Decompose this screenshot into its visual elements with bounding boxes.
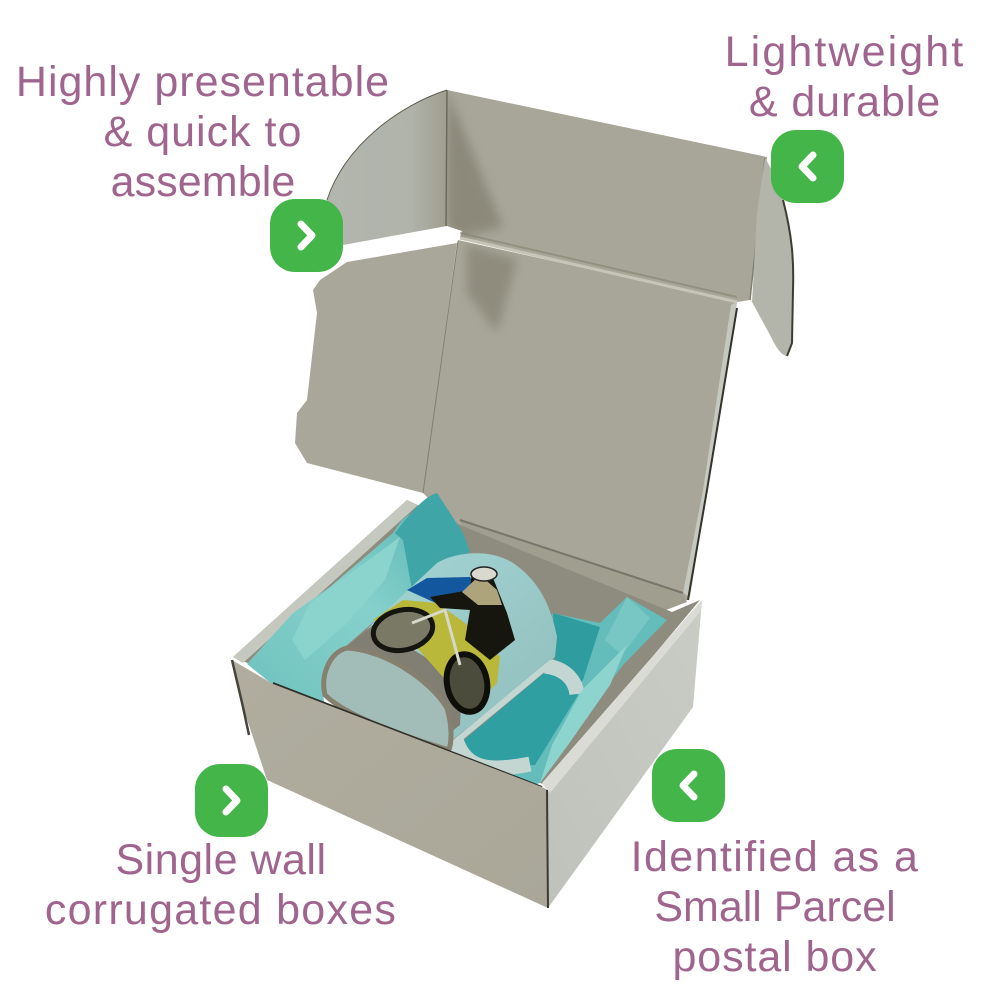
caption: top right: Lightweight — [725, 28, 965, 76]
mug print: rider — [430, 570, 515, 660]
box left rim — [233, 500, 418, 663]
upper lid flap — [446, 90, 767, 302]
caption: bottom right: Identified as a — [631, 833, 919, 881]
caption: bottom left: corrugated boxes — [45, 886, 397, 934]
upper left dust flap — [327, 90, 447, 246]
caption: bottom right: Small Parcel — [654, 883, 896, 931]
mug print: bicycle — [369, 604, 437, 656]
icon: green arrow right, top left — [270, 199, 343, 272]
box front rim shadow — [273, 683, 542, 787]
caption: top right: & durable — [749, 78, 941, 126]
icon: green arrow right, bottom left — [195, 764, 268, 837]
right side flap — [752, 158, 793, 356]
caption: top left: & quick to — [104, 108, 302, 156]
mug print: yellow hill — [373, 600, 500, 710]
illustration: open postal box with mug — [230, 90, 794, 908]
box interior — [233, 500, 700, 785]
front tissue strip over handle — [540, 645, 627, 783]
caption: bottom left: Single wall — [115, 836, 327, 884]
icon: green arrow left, top right — [771, 130, 844, 203]
main lid panel — [423, 233, 737, 640]
mug rim — [324, 648, 451, 750]
caption: bottom right — [631, 833, 919, 981]
mug body — [340, 553, 557, 750]
caption: bottom right: postal box — [672, 933, 878, 981]
inside handle tissue — [458, 668, 578, 768]
box front wall — [232, 660, 548, 908]
blue tissue paper — [247, 493, 667, 787]
caption: bottom left — [45, 836, 397, 934]
lid lower fold strip — [460, 520, 687, 635]
caption: top right — [725, 28, 965, 126]
mug body lower edge — [453, 662, 552, 744]
mug print: sky — [407, 577, 487, 605]
mug — [324, 553, 578, 768]
left inner flap — [295, 243, 457, 493]
box right wall — [542, 600, 702, 908]
icon: green arrow left, bottom right — [652, 749, 725, 822]
caption: top left — [16, 58, 390, 206]
lid right strip — [683, 302, 737, 597]
caption: top left: assemble — [111, 158, 295, 206]
mug print: grey band — [330, 625, 463, 735]
mug handle — [545, 666, 577, 694]
caption: top left: Highly presentable — [16, 58, 390, 106]
lid shadow patch — [467, 244, 517, 333]
